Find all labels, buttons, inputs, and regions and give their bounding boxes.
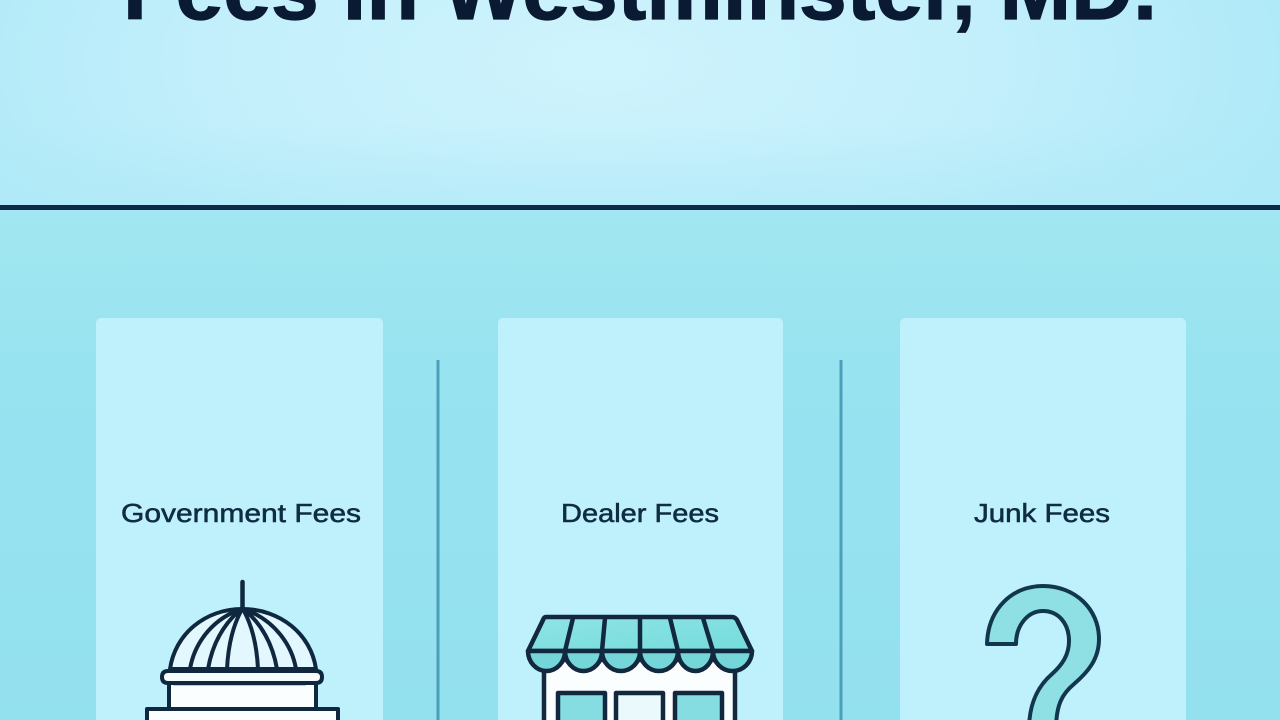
divider	[436, 360, 440, 720]
panel: lower background	[0, 209, 1280, 720]
heading: junk fees: Junk Fees	[974, 498, 1110, 528]
panel: junk fees	[900, 318, 1186, 720]
panel: header background	[0, 0, 1280, 206]
icon: capitol dome	[147, 582, 338, 720]
panel: government fees	[96, 318, 383, 720]
icon: question mark	[987, 586, 1099, 720]
heading: government fees: Government Fees	[121, 498, 361, 528]
panel: dealer fees	[498, 318, 783, 720]
header rule	[0, 205, 1280, 210]
heading: dealer fees: Dealer Fees	[561, 498, 719, 528]
divider	[840, 360, 842, 720]
icon: storefront	[528, 617, 752, 720]
